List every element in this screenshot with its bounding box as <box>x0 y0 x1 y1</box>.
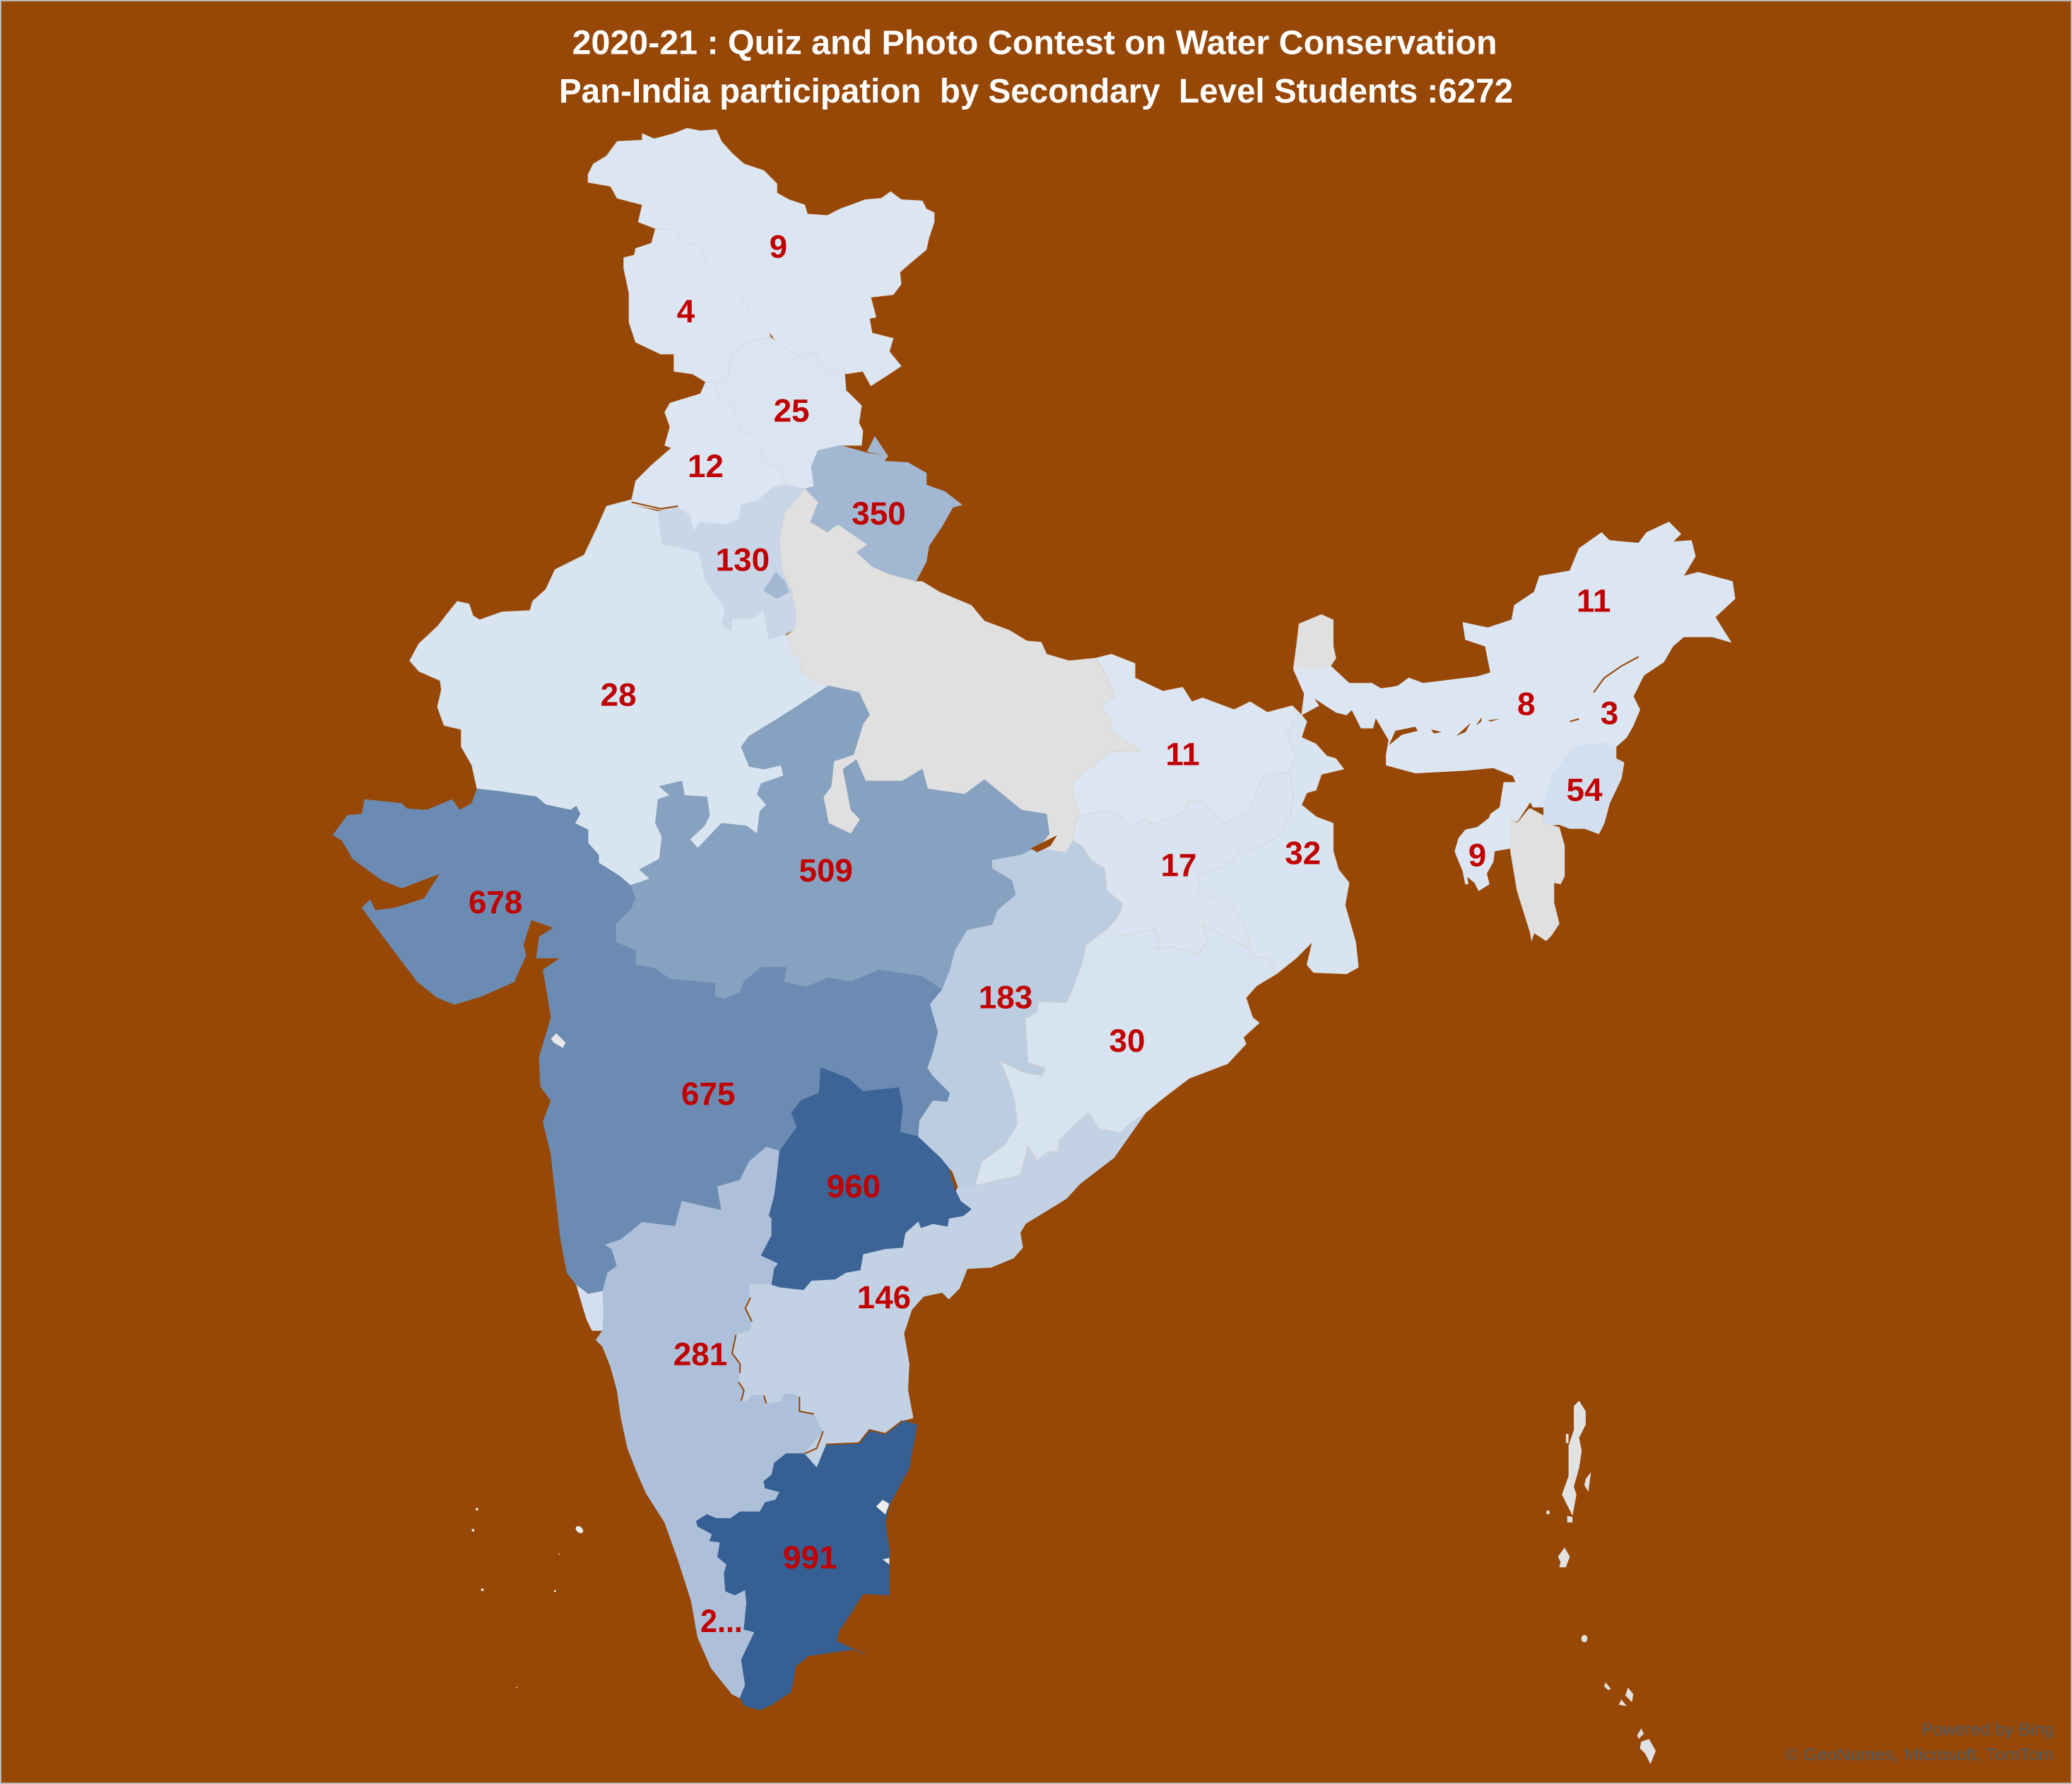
state: Maharashtra <box>539 942 950 1293</box>
state: Nagaland <box>1554 657 1644 763</box>
title: 2020-21 : Quiz and Photo Contest on Water Conservation <box>572 24 1497 62</box>
label: Arunachal Pradesh: 11 <box>1577 583 1611 619</box>
state: Telangana <box>761 1068 971 1290</box>
islands: Lakshadweep <box>472 1508 584 1688</box>
state: Assam, Meghalaya and Tripura <box>1294 601 1669 891</box>
boundary gaps <box>632 374 1639 1454</box>
state: West Bengal <box>1197 712 1358 974</box>
state: Kerala <box>628 1448 755 1698</box>
label: Andhra Pradesh: 146 <box>857 1279 911 1315</box>
state: Punjab <box>632 382 787 532</box>
state: Uttar Pradesh <box>779 489 1141 852</box>
label: Tripura: 9 <box>1468 838 1486 874</box>
label: Maharashtra: 675 <box>681 1076 735 1112</box>
label: Kerala: 2... <box>700 1603 743 1639</box>
label: Chhattisgarh: 183 <box>979 980 1032 1016</box>
label: Haryana: 130 <box>716 542 770 578</box>
label: Jharkhand: 17 <box>1160 847 1196 884</box>
attribution: © GeoNames, Microsoft, TomTom <box>1785 1745 2054 1764</box>
icon: Mumbai island <box>551 1033 565 1048</box>
state: Rajasthan <box>410 500 828 886</box>
icon: Puducherry enclaves <box>876 1500 889 1565</box>
attribution <box>1785 1720 2054 1764</box>
state: Madhya Pradesh <box>616 686 1049 999</box>
state: Goa <box>576 1284 604 1331</box>
islands: Andaman and Nicobar <box>1546 1401 1656 1764</box>
label: Jammu and Kashmir: 4 <box>677 293 695 329</box>
state: Jammu and Kashmir <box>624 228 770 383</box>
state: Mizoram <box>1510 809 1565 941</box>
label: Uttarakhand: 350 <box>852 495 906 532</box>
label: Punjab: 12 <box>688 448 724 484</box>
label: Telangana: 960 <box>827 1168 881 1204</box>
state: Arunachal Pradesh <box>1463 522 1735 675</box>
label: Ladakh: 9 <box>770 229 787 265</box>
label: Tamil Nadu: 991 <box>783 1539 837 1575</box>
label: Assam: 8 <box>1517 686 1535 722</box>
label: Himachal Pradesh: 25 <box>774 392 810 428</box>
label: Gujarat: 678 <box>469 884 522 920</box>
state: Haryana <box>658 485 805 640</box>
state: Jharkhand <box>1073 772 1294 956</box>
title <box>559 24 1513 110</box>
label: Odisha: 30 <box>1109 1023 1146 1059</box>
state: Gujarat <box>333 789 635 1048</box>
state: Uttarakhand northern tip <box>867 436 888 456</box>
state: Odisha <box>975 924 1276 1185</box>
map of India <box>333 128 1735 1764</box>
state: Tamil Nadu <box>696 1421 917 1710</box>
label: Manipur: 54 <box>1567 772 1603 808</box>
state: Manipur <box>1543 743 1624 834</box>
label: West Bengal: 32 <box>1285 835 1321 872</box>
state: Andhra Pradesh <box>732 1113 1146 1467</box>
state: Uttarakhand <box>805 445 962 582</box>
state value labels <box>469 229 1618 1639</box>
state: Himachal Pradesh <box>716 337 863 489</box>
label: Bihar: 11 <box>1165 737 1200 773</box>
label: Karnataka: 281 <box>673 1336 727 1372</box>
title: Pan-India participation by Secondary Level Students :6272 <box>559 72 1513 110</box>
state: Sikkim <box>1294 614 1336 670</box>
label: Nagaland: 3 <box>1601 696 1618 732</box>
state: Bihar <box>1073 654 1299 827</box>
state: Chhattisgarh <box>919 840 1123 1187</box>
attribution: Powered by Bing <box>1921 1720 2054 1739</box>
state: Ladakh <box>588 128 934 386</box>
state: Karnataka <box>596 1147 823 1518</box>
label: Madhya Pradesh: 509 <box>799 852 853 888</box>
state: Delhi <box>764 573 789 599</box>
label: Rajasthan: 28 <box>601 676 637 712</box>
